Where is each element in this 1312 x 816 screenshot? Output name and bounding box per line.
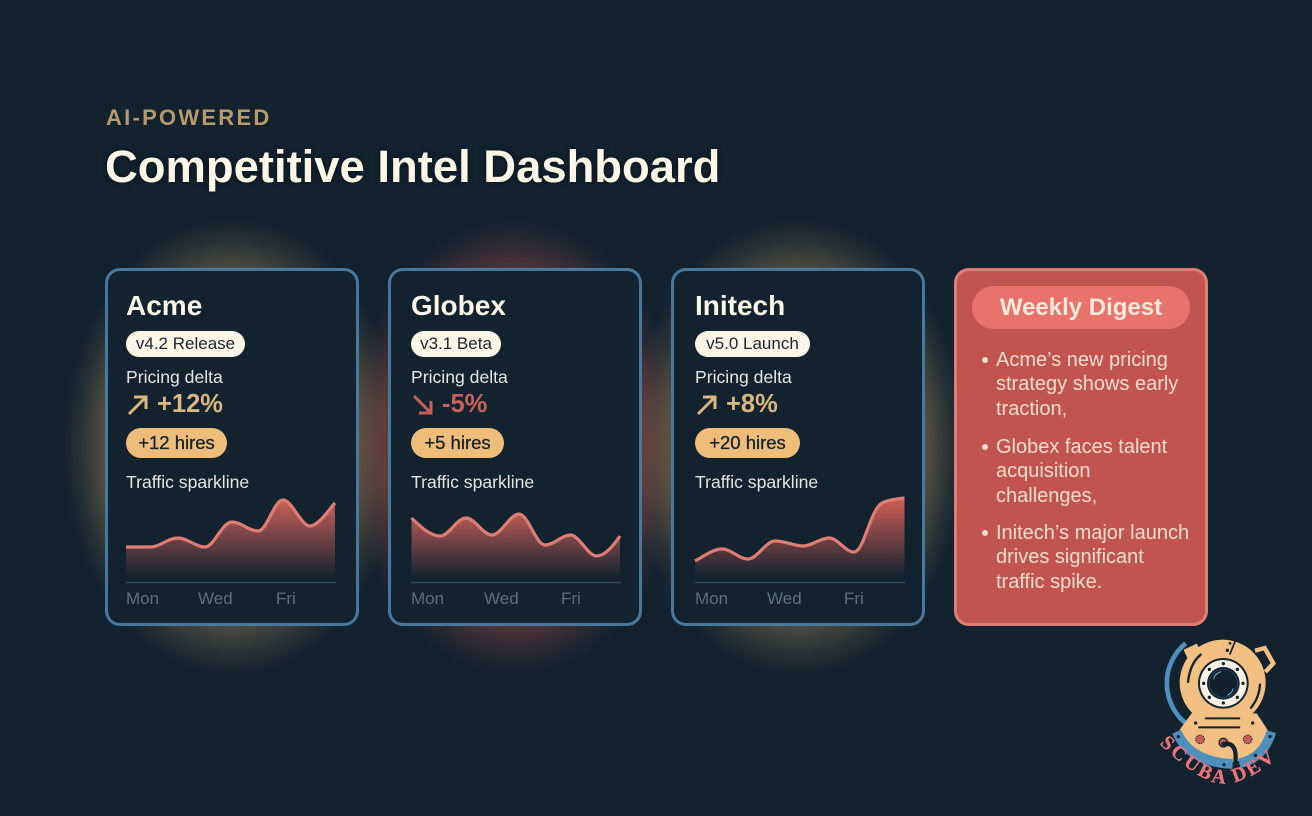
badge: version: v5.0 Launch — [706, 334, 799, 353]
axis label: Mon: Mon — [126, 589, 159, 608]
badge: hires — [411, 428, 504, 458]
heading: Weekly Digest: Weekly Digest — [1000, 294, 1162, 321]
axis label: Fri: Fri — [844, 589, 864, 608]
badge: version — [695, 331, 810, 357]
bullet: Globex: Globex faces talent — [996, 436, 1167, 458]
axis label: Fri: Fri — [561, 589, 581, 608]
bullet: Initech: traffic spike. — [996, 571, 1102, 593]
label: pricing delta: Pricing delta — [695, 367, 792, 387]
porthole — [1198, 658, 1249, 709]
icon: up arrow — [128, 396, 148, 415]
heading: Weekly Digest — [972, 286, 1190, 329]
wordmark: SCUBA DEV — [1160, 736, 1271, 784]
badge: hires: +12 hires — [138, 432, 215, 453]
label: pricing delta: Pricing delta — [411, 367, 508, 387]
panel: Globex — [388, 268, 642, 626]
label: traffic sparkline: Traffic sparkline — [695, 472, 818, 492]
axis label: Mon: Mon — [411, 589, 444, 608]
logo: Scuba Dev diving helmet — [1160, 640, 1276, 784]
bullet: Globex: challenges, — [996, 485, 1097, 507]
badge: hires: +20 hires — [709, 432, 786, 453]
icon: up arrow — [697, 396, 716, 415]
bullet: Acme — [982, 349, 1178, 420]
bullet: Initech: Initech’s major launch — [996, 522, 1189, 544]
panel: Acme — [105, 268, 359, 626]
badge: hires: +5 hires — [424, 432, 491, 453]
panel: Weekly Digest — [954, 268, 1208, 626]
axis label: Wed: Wed — [198, 589, 233, 608]
axis label: Mon: Mon — [695, 589, 728, 608]
axis label: Wed: Wed — [484, 589, 519, 608]
bullet: Acme: Acme’s new pricing — [996, 349, 1168, 371]
helmet handle — [1255, 648, 1273, 672]
name: Globex: Globex — [411, 290, 506, 321]
bolts — [1194, 642, 1254, 747]
badge: hires — [126, 428, 227, 458]
value: pricing change: -5% — [442, 390, 487, 418]
sparkline chart — [694, 496, 905, 584]
badge: version — [126, 331, 245, 357]
eyebrow: AI-powered: AI-POWERED — [106, 105, 272, 130]
blue side arc — [1167, 643, 1187, 724]
value: pricing change: +12% — [157, 390, 223, 418]
blue collar — [1177, 732, 1271, 764]
badge: version: v3.1 Beta — [420, 334, 492, 353]
panel: Initech — [671, 268, 925, 626]
bullet: Initech — [982, 522, 1189, 593]
label: pricing delta: Pricing delta — [126, 367, 223, 387]
sparkline chart — [410, 512, 622, 584]
axis label: Fri: Fri — [276, 589, 296, 608]
collar rivets — [1177, 735, 1272, 766]
name: Acme: Acme — [126, 290, 202, 321]
badge: version — [411, 331, 501, 357]
helmet details — [1188, 640, 1260, 727]
bullet: Acme: traction, — [996, 398, 1067, 420]
value: pricing change: +8% — [726, 390, 778, 418]
label: traffic sparkline: Traffic sparkline — [411, 472, 534, 492]
air hose — [1223, 744, 1236, 768]
bullet: Acme: strategy shows early — [996, 373, 1178, 395]
title: Competitive Intel Dashboard — [105, 141, 720, 192]
badge: hires — [695, 428, 800, 458]
bullet: Globex: acquisition — [996, 460, 1091, 482]
helmet body — [1177, 640, 1269, 763]
name: Initech: Initech — [695, 290, 785, 321]
icon: down arrow — [413, 395, 432, 414]
label: traffic sparkline: Traffic sparkline — [126, 472, 249, 492]
axis label: Wed: Wed — [767, 589, 802, 608]
sparkline chart — [126, 498, 336, 584]
badge: version: v4.2 Release — [136, 334, 235, 353]
bullet: Globex — [982, 436, 1168, 507]
bullet: Initech: drives significant — [996, 546, 1144, 568]
